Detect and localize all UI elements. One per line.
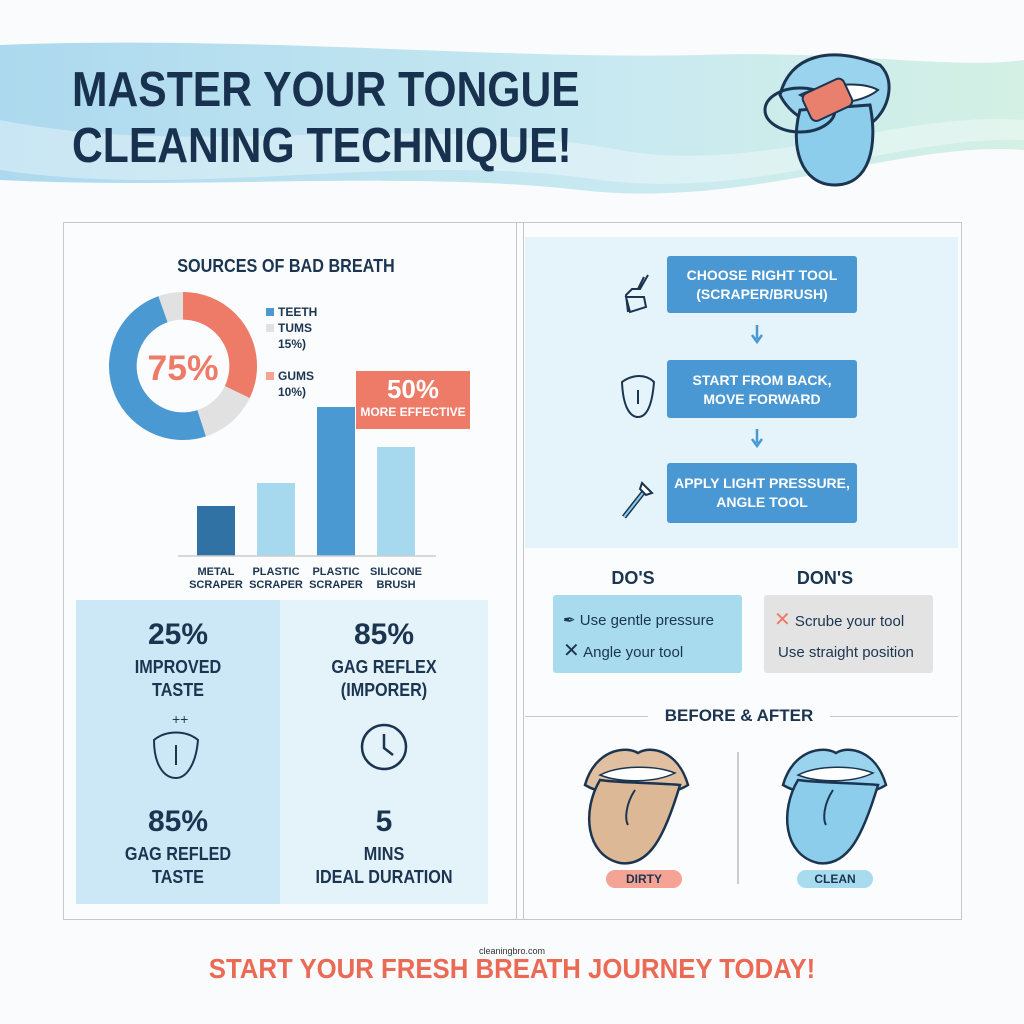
icon: scraper	[622, 481, 654, 518]
label: clean: CLEAN	[814, 872, 856, 886]
heading: before & after	[525, 716, 958, 717]
heading: do's: DO'S	[611, 568, 655, 588]
title: MASTER YOUR TONGUE	[72, 63, 580, 117]
heading: don'ts: DON'S	[797, 568, 853, 588]
panel: stats	[76, 600, 488, 904]
bar chart: SCRAPER	[309, 579, 363, 591]
icon: tongue	[153, 711, 199, 779]
stat: duration: IDEAL DURATION	[315, 867, 453, 887]
don'ts box: ✕ Scrube your tool	[774, 609, 904, 631]
stat: duration	[315, 805, 453, 887]
step 3: APPLY LIGHT PRESSURE,	[674, 475, 850, 491]
icon: tongue	[621, 375, 655, 418]
arrow	[751, 429, 763, 448]
bar chart: BRUSH	[376, 579, 416, 591]
don'ts box: Use straight position	[778, 644, 914, 661]
legend: 15%)	[278, 337, 306, 351]
arrow	[751, 325, 763, 344]
step 3: ANGLE TOOL	[716, 494, 808, 510]
donut chart: 75%	[147, 348, 219, 388]
bar chart: SILICONE	[370, 566, 422, 578]
stat: improved taste: TASTE	[152, 680, 204, 700]
stat: gag refled taste: TASTE	[152, 867, 204, 887]
stat: gag reflex: GAG REFLEX	[331, 657, 437, 677]
do's box: ✕ Angle your tool	[563, 640, 683, 662]
legend	[266, 305, 317, 399]
bar chart: PLASTIC	[252, 566, 300, 578]
icon: dirty tongue	[584, 748, 690, 865]
footer call to action: START YOUR FRESH BREATH JOURNEY TODAY!	[209, 953, 815, 984]
stat: improved taste: IMPROVED	[135, 657, 221, 677]
legend: GUMS	[278, 369, 314, 383]
step 3	[667, 463, 857, 523]
do's box: ✒ Use gentle pressure	[563, 612, 714, 629]
icon: clean tongue	[782, 748, 888, 865]
stat: duration: 5	[376, 805, 392, 838]
bar chart: PLASTIC	[312, 566, 360, 578]
panel: steps	[525, 237, 958, 548]
label: dirty: DIRTY	[626, 872, 662, 886]
source text: cleaningbro.com	[479, 946, 545, 956]
stat: gag reflex: (IMPORER)	[341, 680, 427, 700]
label: clean	[797, 870, 873, 888]
icon: hand	[624, 274, 649, 314]
icon: clock	[360, 724, 408, 770]
icon: tongue with brush	[764, 53, 891, 186]
stat: gag reflex: 85%	[354, 618, 414, 651]
step 2: START FROM BACK,	[693, 372, 831, 388]
panel: sources of bad breath	[109, 256, 470, 591]
step 1	[667, 256, 857, 313]
bar chart: SCRAPER	[249, 579, 303, 591]
don'ts box	[764, 595, 933, 673]
step 1: CHOOSE RIGHT TOOL	[687, 267, 837, 283]
donut chart	[109, 292, 257, 440]
callout: 50% more effective: MORE EFFECTIVE	[360, 405, 466, 419]
step 1: (SCRAPER/BRUSH)	[696, 286, 828, 302]
bar chart: METAL	[197, 566, 235, 578]
stat: improved taste: 25%	[148, 618, 208, 651]
stat: gag refled taste: 85%	[148, 805, 208, 838]
title: CLEANING TECHNIQUE!	[72, 119, 572, 173]
legend: 10%)	[278, 385, 306, 399]
do's box	[553, 595, 742, 673]
callout: 50% more effective	[356, 371, 470, 429]
step 2: MOVE FORWARD	[703, 391, 821, 407]
legend: TUMS	[278, 321, 312, 335]
stat: gag reflex	[331, 618, 437, 700]
step 2	[667, 360, 857, 418]
main frame	[63, 222, 962, 920]
text: BEFORE & AFTER	[665, 706, 813, 725]
legend: TEETH	[278, 305, 317, 319]
stat: improved taste	[135, 618, 221, 700]
callout: 50% more effective: 50%	[387, 374, 439, 404]
title	[72, 63, 580, 173]
stat: duration: MINS	[364, 844, 404, 864]
icon: tongue: ++	[172, 711, 188, 727]
bar chart	[178, 407, 436, 591]
heading: sources: SOURCES OF BAD BREATH	[177, 256, 395, 276]
header wave background	[0, 42, 1024, 194]
bar chart: SCRAPER	[189, 579, 243, 591]
stat: gag refled taste: GAG REFLED	[125, 844, 231, 864]
stat: gag refled taste	[125, 805, 231, 887]
label: dirty	[606, 870, 682, 888]
